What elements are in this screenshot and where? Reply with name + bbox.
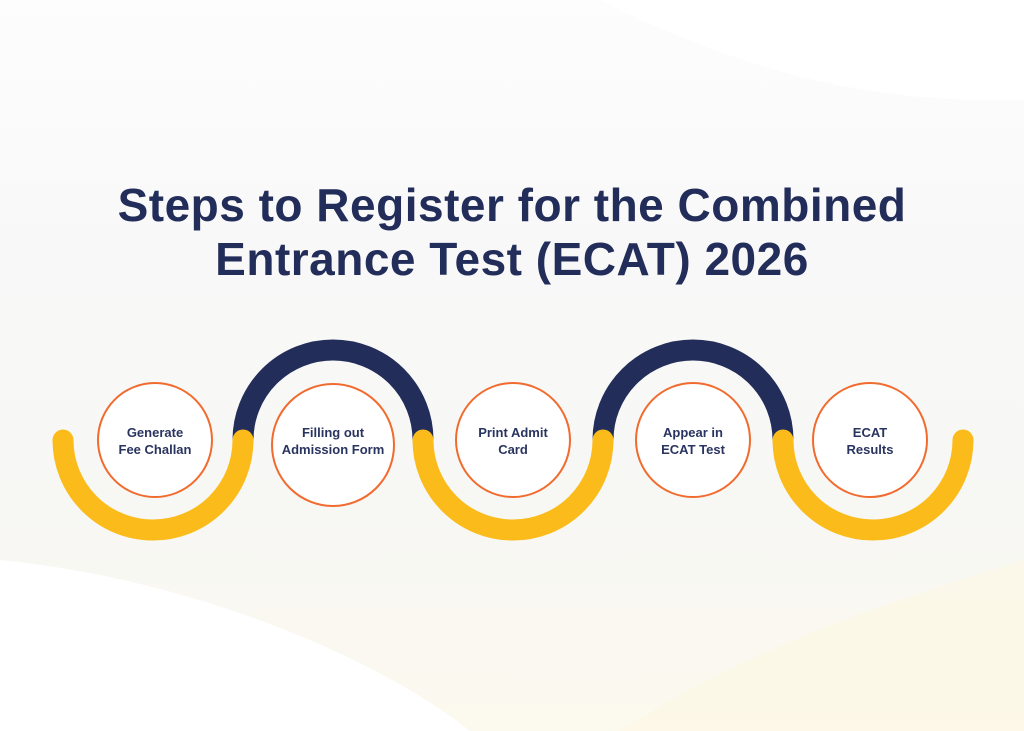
step 3 label: Card <box>498 442 528 457</box>
step 1 label <box>119 425 191 457</box>
step 2 label: Admission Form <box>282 442 384 457</box>
step 5 label <box>847 425 893 457</box>
title: Entrance Test (ECAT) 2026 <box>215 233 809 285</box>
step 3 label <box>478 425 548 457</box>
step 1 label: Fee Challan <box>119 442 191 457</box>
step 4 label: ECAT Test <box>661 442 725 457</box>
step 4 label: Appear in <box>663 425 723 440</box>
title <box>118 179 906 285</box>
step 4 label <box>661 425 725 457</box>
yellow arcs <box>63 440 963 530</box>
step 2 label: Filling out <box>302 425 364 440</box>
step 3 label: Print Admit <box>478 425 548 440</box>
step circles <box>98 383 927 506</box>
title: Steps to Register for the Combined <box>118 179 906 231</box>
step 2 label <box>282 425 384 457</box>
step 1 label: Generate <box>127 425 183 440</box>
step 5 label: Results <box>847 442 893 457</box>
navy arcs <box>243 350 783 440</box>
step 5 label: ECAT <box>853 425 887 440</box>
